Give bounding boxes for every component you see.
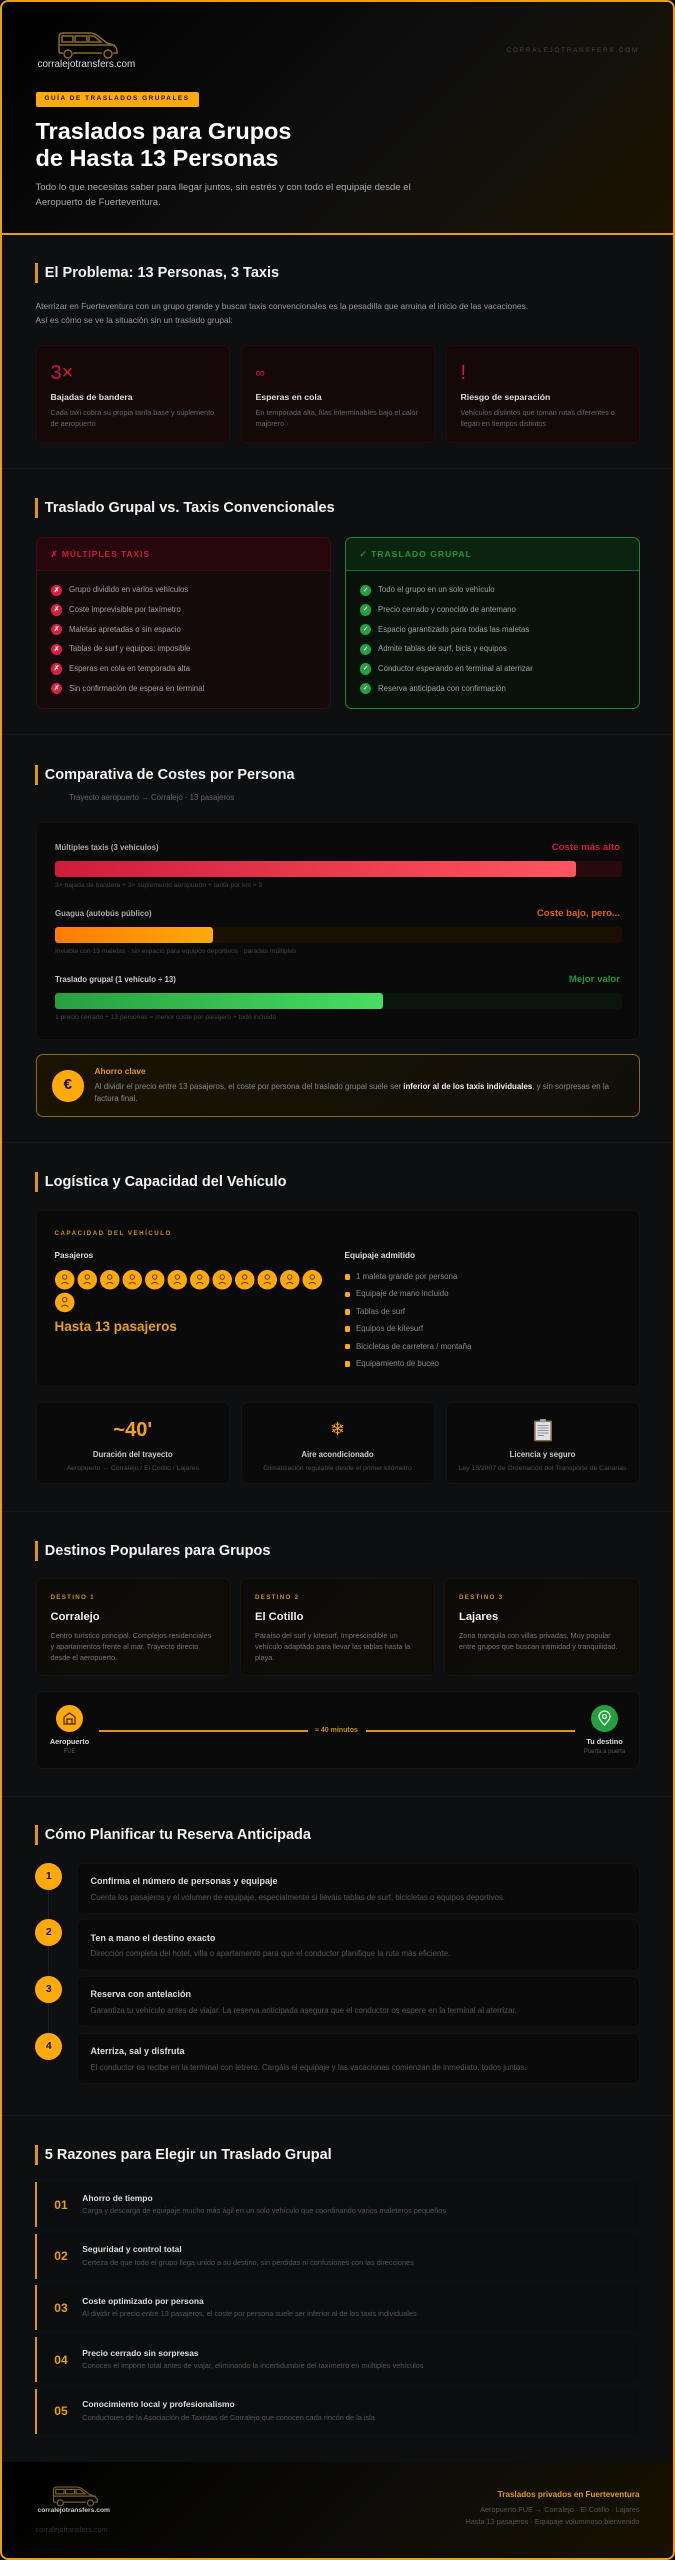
item: ✓ [363,626,368,633]
footer logo [38,2486,110,2514]
item: ✗ [54,646,59,653]
heading: Comparativa de Costes por Persona [45,767,295,783]
heading: El Problema: 13 Personas, 3 Taxis [45,265,279,281]
origin code: FUE [64,1749,76,1755]
panel: group transfer [344,537,640,709]
card text: Climatización regulable desde el primer kilómetro [263,1465,412,1472]
card text: entre grupos que buscan intimidad y tranquilidad. [459,1642,617,1651]
card: licence [446,1402,640,1484]
step card 4: Aterriza, sal y disfruta [90,2046,185,2056]
card title: Bajadas de bandera [50,392,133,402]
intro text: Así es cómo se ve la situación sin un traslado grupal: [36,314,233,324]
arrow line [366,1730,574,1732]
item: ✗ [54,665,59,672]
item: ✗ [54,606,59,613]
icon: van [58,32,118,59]
reason 5: 05 [54,2404,68,2418]
item: Todo el grupo en un solo vehículo [378,585,495,594]
footer [0,2462,675,2560]
item [51,604,181,616]
destination label: Tu destino [586,1737,623,1746]
card: Lajares: DESTINO 3 [459,1594,503,1601]
step card 1: Cuenta los pasajeros y el volumen de equipaje, especialmente si lleváis tablas de surf, bicicletas o equipos deportivos. [90,1893,505,1902]
item: ✗ [54,587,59,594]
footer site: corralejotransfers.com [36,2525,108,2534]
card text [50,408,214,428]
step card 1 [76,1863,640,1914]
item: Conductor esperando en terminal al aterrizar [378,664,533,673]
step card 4: El conductor os recibe en la terminal con letrero. Cargáis el equipaje y las vacaciones comienzan de inmediato, todos juntos. [90,2063,526,2072]
card: El Cotillo: DESTINO 2 [255,1594,299,1601]
panel title: ✗ MÚLTIPLES TAXIS [50,549,150,559]
title: de Hasta 13 Personas [36,144,278,170]
step number 1: 1 [46,1870,52,1882]
passenger icons [55,1270,322,1312]
item: Admite tablas de surf, bicis y equipos [378,644,507,653]
card: El Cotillo [240,1578,435,1676]
icon: destination pin [591,1705,618,1732]
list: luggage: Equipos de kitesurf [356,1324,423,1333]
callout title: Ahorro clave [94,1066,146,1076]
bar row: group: Traslado grupal (1 vehículo ÷ 13) [55,975,176,984]
reason 2: 02 [54,2249,68,2263]
header [0,0,675,234]
card text: Aeropuerto → Corralejo / El Cotillo / Lajares [67,1465,199,1472]
bar row: taxis: Coste más alto [552,842,620,853]
item: Sin confirmación de espera en terminal [69,684,204,693]
item: ✗ [54,685,59,692]
intro text: Aterrizar en Fuerteventura con un grupo grande y buscar taxis convencionales es la pesadilla que arruina el inicio de las vacaciones. [36,300,528,310]
card: Lajares: Lajares [459,1611,498,1623]
callout text [94,1082,609,1103]
icon: snowflake: ❄ [330,1419,345,1440]
item: ✓ [363,685,368,692]
footer text: Aeropuerto FUE → Corralejo · El Cotillo · Lajares [480,2505,640,2514]
card title: Esperas en cola [256,392,322,402]
item: Coste imprevisible por taxímetro [69,605,181,614]
step card 2: Ten a mano el destino exacto [90,1933,215,1943]
card text: Paraíso del surf y kitesurf. Imprescindible un [255,1631,398,1640]
reason 2: Certeza de que todo el grupo llega unido a su destino, sin pérdidas ni confusiones con las direcciones [82,2258,414,2267]
reason 4: 04 [54,2352,68,2366]
card title: Riesgo de separación [460,392,550,402]
item [360,663,533,675]
item: Grupo dividido en varios vehículos [69,585,188,594]
title: Traslados para Grupos [36,118,291,144]
card text: Zona tranquila con villas privadas. Muy popular [459,1631,611,1640]
item [51,663,190,675]
heading: Cómo Planificar tu Reserva Anticipada [45,1827,311,1843]
arrow line [98,1730,308,1732]
badge text: GUÍA DE TRASLADOS GRUPALES [44,95,190,102]
step number 3 [35,1976,62,2003]
footer text [465,2505,640,2526]
reason 4: Conoces el importe total antes de viajar, eliminando la incertidumbre del taxímetro en múltiples vehículos [82,2361,424,2370]
list: luggage: Equipamiento de buceo [356,1359,439,1368]
icon: van [52,2486,98,2506]
reason 1 [35,2182,639,2227]
subtitle [36,182,411,208]
title [36,118,291,170]
footer title: Traslados privados en Fuerteventura [498,2490,640,2499]
card text: Ley 13/2007 de Ordenación del Transporte de Canarias [459,1465,626,1472]
capacity value: Hasta 13 pasajeros [54,1319,177,1334]
card text [255,1631,410,1662]
card: Corralejo: Corralejo [50,1611,100,1623]
step card 1: Confirma el número de personas y equipaje [90,1876,278,1886]
reason 1: 01 [54,2198,68,2212]
item: Espacio garantizado para todas las maletas [378,625,529,634]
card text: y apartamentos frente al mar. Trayecto directo [50,1642,198,1651]
badge [36,92,198,107]
step number 4: 4 [46,2040,52,2052]
card: Lajares [444,1578,640,1676]
passengers label: Pasajeros [54,1251,93,1260]
item: Esperas en cola en temporada alta [69,664,190,673]
card title: Licencia y seguro [510,1450,575,1459]
list: luggage: 1 maleta grande por persona [356,1272,457,1281]
reason 5 [35,2389,639,2434]
subheading: Trayecto aeropuerto → Corralejo · 13 pasajeros [69,793,234,802]
icon: clipboard [534,1419,552,1442]
panel header [36,538,330,571]
card text [50,1631,211,1662]
route diagram [36,1691,640,1769]
reason 5: Conocimiento local y profesionalismo [82,2399,235,2409]
icon: infinity: ∞ [256,365,265,380]
list: luggage: Equipaje de mano incluido [356,1289,449,1298]
heading: Traslado Grupal vs. Taxis Convencionales [45,500,335,516]
section: comparison [0,469,675,735]
step number 4 [35,2033,62,2060]
list: luggage [345,1272,472,1368]
callout text: factura final. [94,1094,137,1103]
step number 2 [35,1919,62,1946]
card text: Centro turístico principal. Complejos residenciales [50,1631,211,1640]
logo text: corralejotransfers.com [38,58,135,70]
icon: euro [52,1070,84,1102]
bar row: group: Mejor valor [569,974,620,985]
step card 3: Reserva con antelación [90,1989,191,1999]
item: ✓ [363,646,368,653]
bar row: bus: Inviable con 13 maletas · sin espacio para equipos deportivos · paradas múltiples [55,948,296,955]
reason 5: Conductores de la Asociación de Taxistas de Corralejo que conocen cada rincón de la isla [82,2413,375,2422]
card text [256,408,418,428]
reason 3: Coste optimizado por persona [82,2296,204,2306]
item: ✓ [363,665,368,672]
icon: airport [56,1705,83,1732]
item: Precio cerrado y conocido de antemano [378,605,516,614]
bar chart [36,822,640,1040]
reason 3: 03 [54,2301,68,2315]
bar row: taxis [55,842,622,889]
card: duration [36,1402,230,1484]
item: Reserva anticipada con confirmación [378,684,506,693]
bar row: group [55,974,622,1021]
card text: de aeropuerto [50,419,96,428]
reason 4 [35,2337,639,2382]
card text: En temporada alta, filas interminables bajo el calor [256,408,418,417]
luggage label: Equipaje admitido [344,1251,415,1260]
duration label: ≈ 40 minutos [315,1727,358,1734]
card title: Aire acondicionado [301,1450,374,1459]
reason 3: Al dividir el precio entre 13 pasajeros, el coste por persona suele ser inferior al de los taxis individuales [82,2309,417,2318]
subtitle: Todo lo que necesitas saber para llegar juntos, sin estrés y con todo el equipaje desde el [36,182,411,193]
section: logistics [0,1143,675,1512]
reason 1: Carga y descarga de equipaje mucho más ágil en un solo vehículo que coordinando varios maleteros pequeños [82,2206,446,2215]
item: ✗ [54,626,59,633]
icon: euro: € [64,1076,72,1093]
card text: llegan en tiempos distintos [460,419,546,428]
bar row: bus: Guagua (autobús público) [55,909,152,918]
heading: Destinos Populares para Grupos [45,1543,270,1559]
reason 2: Seguridad y control total [82,2244,182,2254]
logo [38,32,135,70]
card: El Cotillo: El Cotillo [255,1611,303,1623]
card title: Duración del trayecto [93,1450,173,1459]
reason 4: Precio cerrado sin sorpresas [82,2348,199,2358]
card: separacion [446,345,640,443]
card: esperas [240,345,434,443]
list: luggage: Tablas de surf [356,1307,405,1316]
bar row: taxis: 3× bajada de bandera + 3× suplemento aeropuerto + tarifa por km × 3 [55,882,262,889]
step card 3 [76,1976,640,2027]
card text: Vehículos distintos que toman rutas diferentes o [460,408,615,417]
destination note: Puerta a puerta [584,1749,625,1755]
heading: Logística y Capacidad del Vehículo [45,1174,287,1190]
step number 3: 3 [46,1983,52,1995]
item: ✓ [363,606,368,613]
section: costs [0,735,675,1143]
step card 2: Dirección completa del hotel, villa o apartamento para que el conductor planifique la ruta más eficiente. [90,1949,450,1958]
card: air conditioning [240,1402,434,1484]
card text: playa. [255,1653,274,1662]
item [360,604,516,616]
step number 1 [35,1863,62,1890]
section: reasons [35,2145,446,2434]
subtitle: Aeropuerto de Fuerteventura. [36,197,161,208]
origin label: Aeropuerto [50,1737,89,1746]
footer text: Hasta 13 pasajeros · Equipaje voluminoso bienvenido [465,2517,640,2526]
item: Maletas apretadas o sin espacio [69,625,181,634]
card text: majorero [256,419,284,428]
step card 2 [76,1919,640,1971]
bar row: bus [55,908,622,955]
reason 2 [35,2234,639,2279]
card: Corralejo: DESTINO 1 [50,1594,95,1601]
site label: CORRALEJOTRANSFERS.COM [506,47,639,54]
item: Tablas de surf y equipos: imposible [69,644,190,653]
panel title: ✓ TRASLADO GRUPAL [360,549,472,559]
card: bajadas [36,345,230,443]
icon: exclamation: ! [460,362,466,384]
intro text [36,300,528,324]
panel: capacity [36,1210,640,1387]
card text [459,1631,617,1651]
panel: taxis [36,537,330,709]
reason 3 [35,2285,639,2330]
card: Corralejo [36,1578,230,1676]
list: luggage: Bicicletas de carretera / montaña [356,1342,471,1351]
step card 3: Garantiza tu vehículo antes de viajar. La reserva anticipada asegura que el conductor os espere en la terminal al aterrizar. [90,2006,517,2015]
panel header [346,538,638,571]
bar row: group: 1 precio cerrado ÷ 13 personas = menor coste por pasajero + todo incluido [55,1014,276,1021]
item: ✓ [363,587,368,594]
panel label: CAPACIDAD DEL VEHÍCULO [54,1230,172,1237]
card text: desde el aeropuerto. [50,1653,117,1662]
section: steps [0,1797,675,2116]
section: problem [0,234,675,469]
card text: vehículo adaptado para llevar las tablas hasta la [255,1642,410,1651]
bar row: bus: Coste bajo, pero... [537,908,620,919]
card text [460,408,615,428]
section: destinations [0,1512,675,1797]
bar row: taxis: Múltiples taxis (3 vehículos) [55,843,159,852]
step card 4 [76,2033,640,2084]
stat: 3× [50,362,73,384]
stat: ~40' [113,1419,152,1441]
logo text: corralejotransfers.com [38,2507,110,2514]
step number 2: 2 [46,1926,52,1938]
card text: Cada taxi cobra su propia tarifa base y suplemento [50,408,214,417]
callout [36,1054,640,1117]
reason 1: Ahorro de tiempo [82,2193,153,2203]
callout text: Al dividir el precio entre 13 pasajeros, el coste por persona del traslado grupal suele ser inferior al de los taxis individuales, y sin sorpresas en la [94,1082,609,1091]
heading: 5 Razones para Elegir un Traslado Grupal [45,2147,332,2163]
